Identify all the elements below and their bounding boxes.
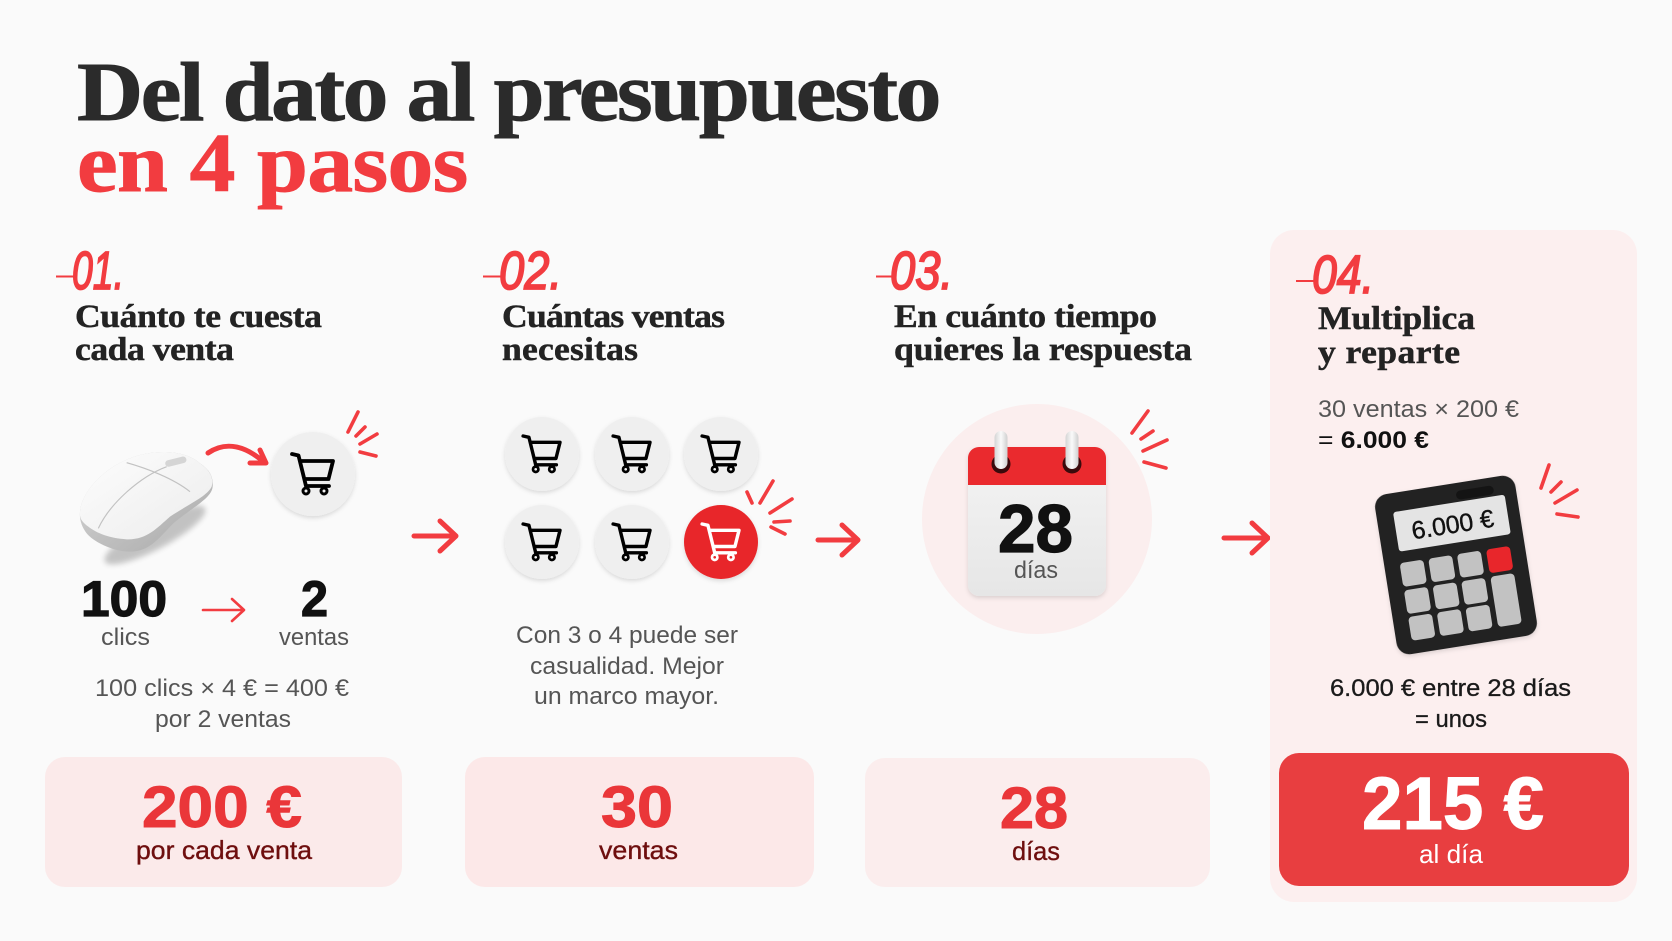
text: division bbox=[1330, 675, 1571, 733]
text: calculation bbox=[95, 675, 350, 733]
step number 03: 03. bbox=[890, 241, 953, 301]
heading: step 2: Cuántas ventas bbox=[502, 298, 725, 335]
heading: step 4: y reparte bbox=[1318, 334, 1460, 371]
step number 02 bbox=[483, 241, 562, 301]
result box: 30 ventas: 30 bbox=[601, 775, 673, 840]
result box: 30 ventas bbox=[465, 757, 814, 887]
result box: 215 € al día bbox=[1279, 753, 1629, 886]
title bbox=[77, 46, 941, 210]
step number 01 bbox=[56, 241, 124, 301]
icon grid: six cart buttons bbox=[505, 417, 758, 579]
metric: 2 ventas: 2 bbox=[301, 571, 328, 627]
heading: step 1: Cuánto te cuesta bbox=[75, 298, 322, 335]
heading: step 1 bbox=[75, 298, 322, 368]
metric: 2 ventas bbox=[279, 571, 349, 651]
title: Del dato al presupuesto bbox=[77, 46, 941, 139]
heading: step 3 bbox=[894, 298, 1192, 368]
result box: 215 € al día: al día bbox=[1419, 839, 1484, 869]
heading: step 2 bbox=[502, 298, 725, 368]
text: calculation: 100 clics × 4 € = 400 € bbox=[95, 675, 350, 702]
sparks: cart bbox=[348, 412, 377, 456]
text: explanation: casualidad. Mejor bbox=[530, 653, 724, 680]
title: en 4 pasos bbox=[77, 117, 468, 210]
sparks: calculator bbox=[1541, 465, 1578, 517]
text: multiplication: 30 ventas × 200 € bbox=[1318, 396, 1520, 423]
result box: 28 días bbox=[865, 758, 1210, 887]
arrow: mouse to cart bbox=[208, 446, 266, 463]
text: multiplication: = 6.000 € bbox=[1318, 427, 1429, 454]
arrow: step 2 to 3 bbox=[818, 525, 858, 555]
icon: calculator: 6.000 € bbox=[1410, 505, 1496, 545]
result box: 28 días: días bbox=[1012, 836, 1060, 866]
text: division: = unos bbox=[1415, 706, 1487, 733]
metric: 100 clics: 100 bbox=[81, 571, 167, 627]
arrow: step 1 to 2 bbox=[414, 521, 456, 551]
step number 04 bbox=[1296, 245, 1374, 305]
icon: calendar 28 días: días bbox=[1014, 557, 1058, 584]
sparks: calendar bbox=[1132, 411, 1167, 468]
heading: step 3: En cuánto tiempo bbox=[894, 298, 1157, 335]
icon: computer mouse bbox=[80, 452, 213, 574]
step number 02: 02. bbox=[499, 241, 562, 301]
heading: step 4 bbox=[1318, 300, 1475, 371]
result box: 30 ventas: ventas bbox=[599, 835, 678, 865]
panel: step 4 highlighted bbox=[1270, 230, 1637, 902]
icon: calculator bbox=[1373, 474, 1539, 656]
heading: step 4: Multiplica bbox=[1318, 300, 1475, 337]
panel: step 1 bbox=[45, 241, 402, 887]
icon: calendar 28 días bbox=[922, 404, 1152, 634]
step number 01: 01. bbox=[72, 241, 124, 301]
result box: 28 días: 28 bbox=[1000, 776, 1068, 841]
panel: step 2 bbox=[465, 241, 814, 887]
panel: step 3 bbox=[865, 241, 1210, 887]
step number 04: 04. bbox=[1312, 245, 1374, 305]
text: calculation: por 2 ventas bbox=[155, 706, 291, 733]
metric: 100 clics bbox=[81, 571, 167, 651]
sparks: red cart bbox=[747, 481, 792, 534]
heading: step 1: cada venta bbox=[75, 331, 234, 368]
text: explanation bbox=[516, 622, 738, 710]
heading: step 3: quieres la respuesta bbox=[894, 331, 1192, 368]
result box: 215 € al día: 215 € bbox=[1362, 762, 1544, 845]
text: explanation: un marco mayor. bbox=[534, 683, 719, 710]
heading: step 2: necesitas bbox=[502, 331, 638, 368]
result box: 200 € bbox=[45, 757, 402, 887]
metric: 2 ventas: ventas bbox=[279, 624, 349, 651]
icon: calendar 28 días: 28 bbox=[998, 491, 1073, 567]
arrow: clics to ventas bbox=[203, 599, 244, 621]
text: division: 6.000 € entre 28 días bbox=[1330, 675, 1571, 702]
metric: 100 clics: clics bbox=[101, 624, 150, 651]
arrow: step 3 to 4 bbox=[1224, 523, 1268, 553]
result box: 200 €: 200 € bbox=[142, 775, 302, 840]
text: multiplication bbox=[1318, 396, 1520, 454]
result box: 200 €: por cada venta bbox=[136, 835, 313, 865]
icon: cart button bbox=[271, 432, 355, 516]
text: explanation: Con 3 o 4 puede ser bbox=[516, 622, 738, 649]
